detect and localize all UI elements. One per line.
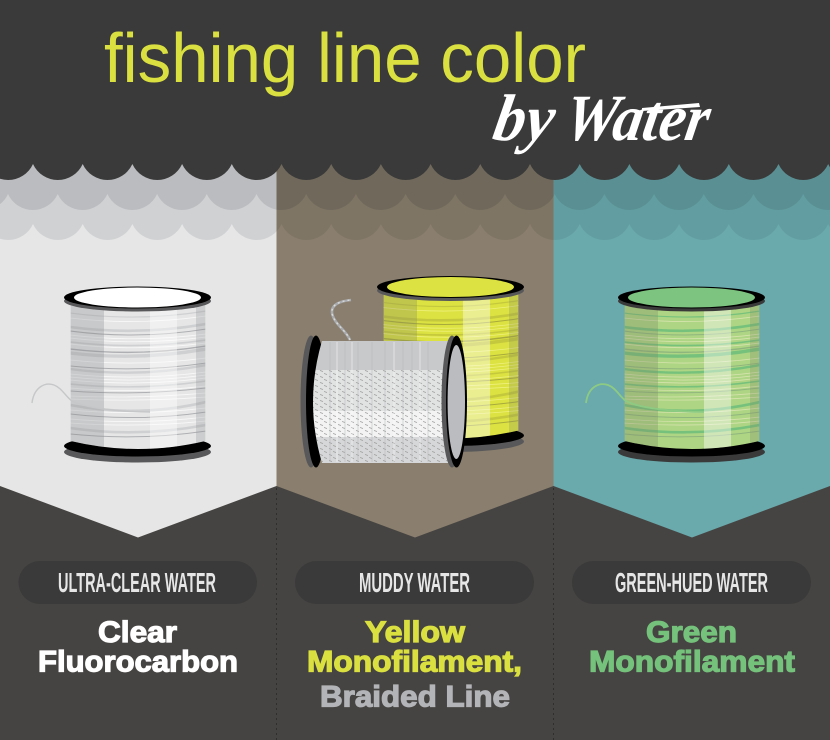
panel: muddy water [276, 164, 554, 538]
icon: braid end [332, 300, 351, 340]
text: clear fluorocarbon: Clear [98, 616, 177, 649]
label pill: muddy water: MUDDY WATER [359, 567, 470, 598]
subtitle: by Water: Water [559, 82, 717, 155]
label pill: ultra-clear water: ULTRA-CLEAR WATER [58, 567, 216, 598]
icon: yellow monofilament spool [377, 276, 524, 456]
label pill: green-hued water [572, 561, 811, 604]
icon: green line end [586, 384, 704, 412]
subtitle: by Water: by [488, 82, 562, 155]
text: green monofilament: Green [646, 616, 737, 649]
label pill: muddy water [295, 561, 534, 604]
icon: clear line end [32, 384, 150, 412]
text: yellow monofilament, braided line: Yellow [365, 616, 466, 649]
text: clear fluorocarbon [38, 616, 238, 678]
subtitle: by Water [488, 82, 717, 155]
icon: clear fluorocarbon spool [32, 286, 211, 466]
title: fishing line color [104, 19, 586, 97]
text: green monofilament [589, 616, 795, 678]
panel: ultra-clear water [0, 164, 276, 538]
text: yellow monofilament, braided line: Monofilament, [307, 646, 522, 678]
label pill: ultra-clear water [18, 561, 257, 604]
text: yellow monofilament, braided line: Braided Line [320, 680, 510, 714]
header band [0, 0, 830, 180]
text: clear fluorocarbon: Fluorocarbon [38, 646, 238, 678]
text: green monofilament: Monofilament [589, 646, 795, 678]
panel: green-hued water [554, 164, 830, 538]
icon: braided line spool [300, 300, 467, 468]
text: yellow monofilament, braided line [307, 616, 522, 714]
icon: green monofilament spool [586, 286, 765, 466]
